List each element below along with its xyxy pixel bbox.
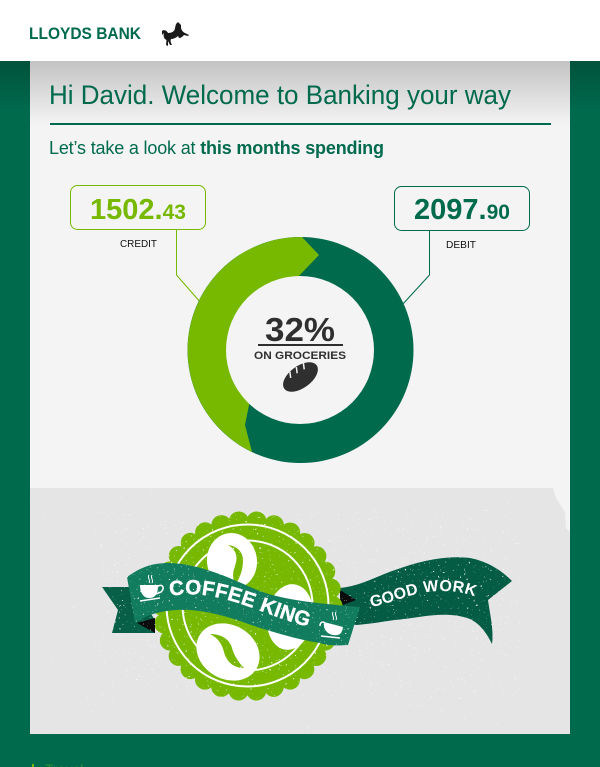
ribbon tail: left bbox=[102, 587, 155, 633]
textured panel bbox=[30, 488, 570, 734]
label: debit: DEBIT bbox=[446, 239, 477, 251]
coffee bean: top bbox=[203, 530, 261, 592]
badge: coffee king bbox=[102, 512, 512, 700]
donut hole bbox=[226, 276, 374, 424]
logo wordmark: LLOYDS BANK bbox=[29, 25, 141, 43]
ribbon fold bbox=[340, 590, 356, 606]
debit segment bbox=[188, 237, 414, 463]
donut chart bbox=[188, 237, 414, 463]
connector: credit bbox=[176, 230, 201, 303]
center stat bbox=[254, 311, 346, 398]
ribbon: good work bbox=[340, 557, 512, 644]
icon: coffee cup left bbox=[140, 575, 163, 601]
seal bbox=[160, 519, 334, 693]
badge distress specks bbox=[100, 510, 520, 700]
header bar bbox=[0, 0, 600, 61]
main panel bbox=[30, 61, 570, 541]
texture specks bbox=[30, 488, 570, 734]
ribbon: coffee king: COFFEE KING bbox=[170, 580, 310, 626]
center stat: 32% bbox=[265, 311, 335, 348]
icon: coffee cup right bbox=[320, 612, 343, 638]
seal rings bbox=[166, 524, 328, 686]
coffee bean: bottom bbox=[186, 612, 270, 692]
ribbon fold: left bbox=[137, 618, 155, 633]
connector: debit bbox=[402, 231, 430, 305]
credit segment bbox=[188, 237, 319, 452]
callout: debit: 2097.90 bbox=[414, 194, 510, 226]
side shading bbox=[0, 61, 600, 111]
title: Hi David. Welcome to Banking your way bbox=[49, 80, 511, 110]
ribbon: good work: GOOD WORK bbox=[370, 580, 478, 606]
icon: black horse bbox=[162, 22, 189, 46]
ribbon: coffee king bbox=[127, 563, 360, 646]
icon: bread bbox=[278, 356, 323, 398]
center stat: ON GROCERIES bbox=[254, 350, 346, 362]
callout: credit bbox=[70, 186, 206, 303]
coffee bean: right bbox=[263, 581, 317, 653]
subtitle: Let’s take a look at this months spending bbox=[49, 138, 384, 158]
callout: credit: 1502.43 bbox=[90, 194, 186, 226]
label: credit: CREDIT bbox=[120, 238, 158, 250]
callout: debit bbox=[394, 186, 530, 305]
